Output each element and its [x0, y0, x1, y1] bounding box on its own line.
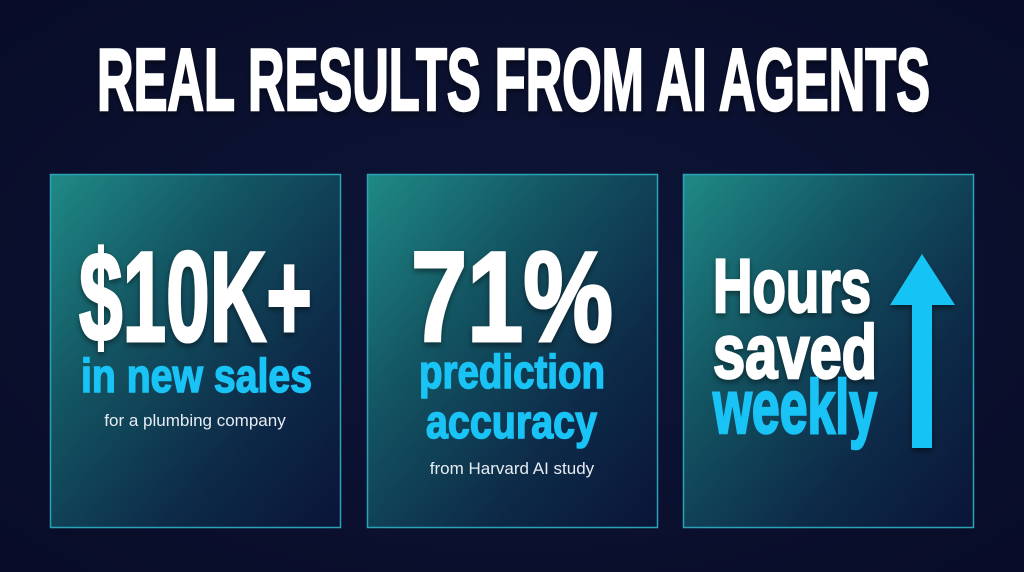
- icon: up arrow: [890, 254, 955, 448]
- label: in new sales: in new sales: [81, 349, 312, 402]
- stat: saved: saved: [713, 310, 877, 395]
- caption: Harvard: from Harvard AI study: [430, 459, 595, 478]
- label: weekly: weekly: [712, 365, 877, 450]
- panel: prediction accuracy: [368, 174, 658, 528]
- stat: 71%: 71%: [411, 226, 613, 369]
- caption: plumbing: for a plumbing company: [104, 411, 286, 430]
- label: prediction: prediction: [419, 345, 605, 398]
- panel: hours saved: [684, 174, 974, 528]
- panel: new sales: [50, 174, 340, 528]
- stat: $10K+: $10K+: [79, 226, 312, 369]
- label: accuracy: accuracy: [426, 395, 597, 448]
- stat: Hours: Hours: [713, 244, 871, 329]
